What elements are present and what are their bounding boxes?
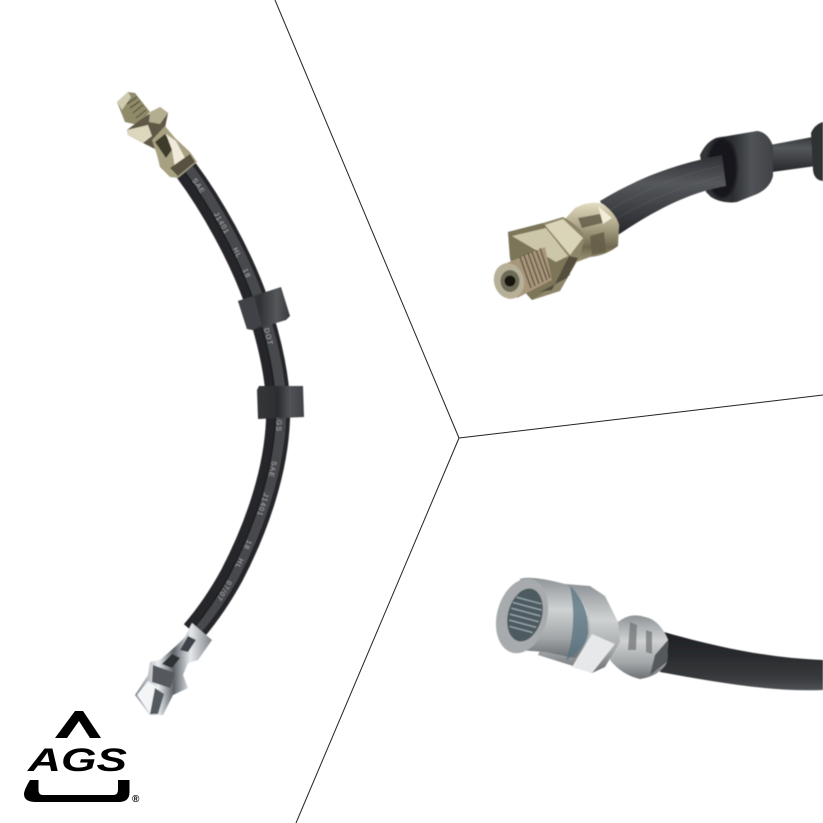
hex nut (538, 584, 620, 673)
hose printing: 07/07 (217, 580, 232, 602)
hose printing: J1401 (256, 492, 269, 516)
crimp collar (152, 126, 197, 178)
hose printing (192, 178, 282, 602)
AGS logo (24, 711, 140, 805)
hex nut (508, 217, 585, 300)
hose printing: AGS (276, 417, 282, 432)
crimp collar (565, 203, 619, 262)
hose body (183, 169, 281, 632)
hose printing: 18 (242, 268, 251, 278)
hose printing: J1401 (214, 212, 229, 234)
top metal fitting (117, 92, 197, 178)
end socket highlight (137, 681, 158, 714)
clamp (700, 131, 773, 202)
thread (502, 247, 552, 298)
crimp shadows (180, 636, 196, 652)
second clamp edge (811, 122, 823, 181)
hex face (152, 665, 175, 688)
hose printing: 18 (244, 540, 252, 550)
upper clamp (238, 287, 290, 330)
hose printing: HL (232, 247, 241, 258)
near hose section (600, 155, 726, 235)
hex nut (127, 107, 168, 150)
full brake hose (116, 92, 305, 716)
logo top chevron (55, 711, 101, 738)
hose section (660, 632, 823, 690)
far hose section (770, 135, 823, 172)
socket opening (488, 573, 556, 659)
thread (117, 92, 150, 125)
hose printing: SAE (268, 460, 278, 478)
fitting silhouette (135, 623, 212, 715)
logo bottom bracket (24, 780, 130, 802)
divider lines (275, 0, 823, 823)
nozzle tip (490, 260, 528, 302)
bottom metal fitting (135, 623, 212, 715)
socket body (518, 578, 590, 658)
hose printing: HL (234, 558, 244, 567)
registered mark: ® (132, 794, 140, 805)
hose printing: DOT (264, 328, 274, 344)
logo wordmark: AGS (27, 742, 128, 778)
close-up: threaded end of hose (490, 122, 823, 302)
hose printing: SAE (192, 178, 206, 194)
close-up: female socket end of hose (488, 573, 823, 690)
lower clamp (257, 386, 304, 419)
crimp collar (610, 615, 668, 679)
